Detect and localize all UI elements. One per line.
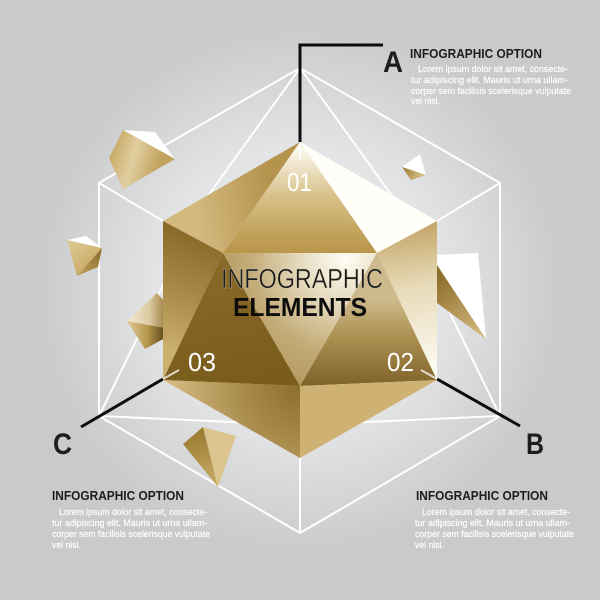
gem: left xyxy=(67,236,102,276)
option B text block: corper sem facilisis scelerisque vulputate xyxy=(415,529,574,540)
option B text block: vel nisl. xyxy=(415,540,444,551)
letter A: A xyxy=(383,46,403,79)
option C text block: vel nisl. xyxy=(52,540,81,551)
gem: upper left xyxy=(109,130,175,189)
title xyxy=(221,263,383,322)
connector tips xyxy=(163,148,437,379)
option C text block xyxy=(52,488,210,551)
option A text block: corper sem facilisis scelerisque vulputate xyxy=(411,86,571,97)
option A text block xyxy=(410,46,571,107)
title: INFOGRAPHIC xyxy=(221,263,383,294)
option B text block xyxy=(415,488,574,551)
number 02: 02 xyxy=(387,347,414,377)
option C text block: INFOGRAPHIC OPTION xyxy=(52,488,184,503)
letter B: B xyxy=(526,428,544,461)
option A text block: vel nisl. xyxy=(411,96,440,107)
number 03: 03 xyxy=(188,347,216,377)
option C text block: Lorem ipsum dolor sit amet, consecte- xyxy=(59,507,207,518)
option B text block: INFOGRAPHIC OPTION xyxy=(416,488,548,503)
black connector lines xyxy=(81,45,520,427)
central polyhedron xyxy=(163,142,437,458)
wireframe hexagon xyxy=(99,68,500,533)
option C text block: corper sem facilisis scelerisque vulputate xyxy=(52,529,210,540)
option A text block: Lorem ipsum dolor sit amet, consecte- xyxy=(418,64,568,75)
title: ELEMENTS xyxy=(233,292,367,322)
option B text block: Lorem ipsum dolor sit amet, consecte- xyxy=(422,507,570,518)
gem: bottom xyxy=(183,427,236,487)
option A text block: tur adipiscing elit. Mauris ut urna ullam- xyxy=(411,75,568,86)
option A text block: INFOGRAPHIC OPTION xyxy=(410,46,542,61)
option B text block: tur adipiscing elit. Mauris ut urna ullam- xyxy=(415,518,570,529)
option C text block: tur adipiscing elit. Mauris ut urna ullam- xyxy=(52,518,207,529)
gem: right large xyxy=(436,253,486,339)
number 01: 01 xyxy=(287,167,312,197)
gem: behind left edge xyxy=(127,293,165,349)
letter C: C xyxy=(53,428,72,461)
gem: upper right small xyxy=(402,154,426,180)
